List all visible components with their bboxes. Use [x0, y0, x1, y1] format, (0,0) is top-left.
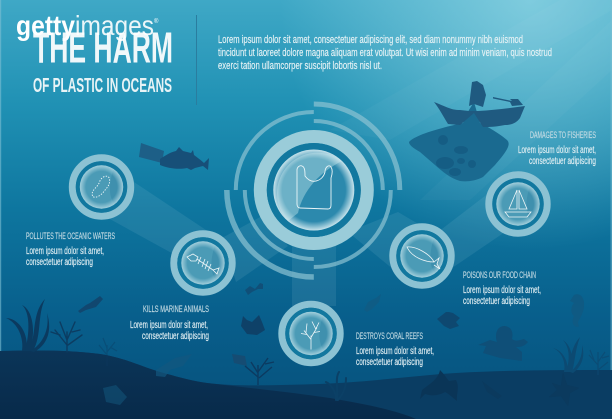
- icon: sailboat: [505, 190, 531, 217]
- label: kills marine animals: KILLS MARINE ANIMALS: [143, 304, 209, 315]
- seahorse: [570, 294, 584, 327]
- label: poisons our food chain: consectetuer adipiscing: [463, 296, 530, 307]
- label: damages to fisheries: [518, 130, 596, 167]
- badge: poisons food chain: [393, 227, 451, 285]
- icon: net: [409, 102, 509, 181]
- subtitle: OF PLASTIC IN OCEANS: [33, 75, 172, 97]
- seabed litter: bottle: [156, 354, 192, 377]
- bottle on seabed right: [482, 381, 502, 399]
- light beams: [108, 176, 530, 306]
- watermark logo: ®: [154, 18, 159, 25]
- icon: net catch: [436, 135, 476, 176]
- watermark logo: getty: [16, 10, 75, 41]
- watermark logo: images: [75, 10, 154, 41]
- badge: damages fisheries: [489, 175, 547, 233]
- label: destroys coral reefs: consectetuer adipiscing: [356, 357, 423, 368]
- label: pollutes the oceanic waters: POLLUTES THE OCEANIC WATERS: [26, 231, 115, 242]
- fishing boat with fisherman and net: [409, 81, 525, 181]
- octopus: [478, 326, 528, 361]
- floating plastic bottle and fish: [139, 143, 209, 170]
- label: kills marine animals: Lorem ipsum dolor sit amet,: [130, 320, 208, 331]
- seabed: [0, 350, 612, 419]
- icon: oar: [493, 97, 523, 106]
- title divider: [196, 15, 197, 105]
- label: kills marine animals: [130, 304, 209, 342]
- title: THE HARM: [33, 24, 173, 72]
- intro paragraph: exerci tation ullamcorper suscipit lobortis nisl ut.: [218, 60, 382, 72]
- sea turtle: [420, 370, 458, 401]
- coral right: [589, 350, 609, 375]
- label: destroys coral reefs: DESTROYS CORAL REEFS: [356, 331, 423, 342]
- icon: microbe: [92, 176, 110, 197]
- icon: fisherman: [469, 81, 486, 107]
- icon: faded coral: [99, 338, 117, 366]
- label: poisons our food chain: Lorem ipsum dolor sit amet,: [463, 285, 541, 296]
- badge: pollutes: [72, 158, 131, 216]
- seabed litter: bag: [103, 385, 127, 405]
- badge: kills marine animals: [174, 234, 232, 292]
- starfish: [549, 373, 579, 406]
- label: pollutes the oceanic waters: consectetuer adipiscing: [26, 257, 93, 268]
- small fish: [437, 312, 460, 329]
- small fish bone trash: [245, 283, 263, 295]
- label: poisons our food chain: [463, 270, 541, 307]
- label: destroys coral reefs: Lorem ipsum dolor sit amet,: [356, 346, 434, 357]
- central plastic bag badge: [227, 104, 400, 277]
- coral and can middle: [232, 354, 274, 385]
- label: kills marine animals: consectetuer adipiscing: [142, 331, 209, 342]
- kelp bottom middle: [326, 372, 346, 400]
- icon: boat hull: [434, 102, 525, 127]
- kelp right: [553, 337, 583, 373]
- bottle left: [78, 296, 103, 313]
- outer broken arcs: [227, 104, 400, 277]
- icon: fish skeleton: [187, 254, 219, 274]
- watermark logo: [16, 10, 159, 41]
- icon: coral: [301, 322, 320, 350]
- badge: destroys coral reefs: [282, 304, 340, 363]
- label: poisons our food chain: POISONS OUR FOOD CHAIN: [463, 270, 536, 281]
- bottle mid: [364, 294, 381, 312]
- kelp and coral left: [6, 299, 117, 366]
- icon: branching coral: [51, 322, 82, 352]
- icon: kelp: [6, 299, 49, 352]
- title: [33, 24, 173, 97]
- intro paragraph: [218, 34, 552, 72]
- label: destroys coral reefs: [356, 331, 434, 368]
- label: pollutes the oceanic waters: Lorem ipsum dolor sit amet,: [26, 246, 104, 257]
- icon: fish: [407, 247, 440, 269]
- label: pollutes the oceanic waters: [26, 231, 115, 268]
- plastic bag silhouette: [241, 315, 265, 335]
- icon: plastic bag: [297, 166, 332, 209]
